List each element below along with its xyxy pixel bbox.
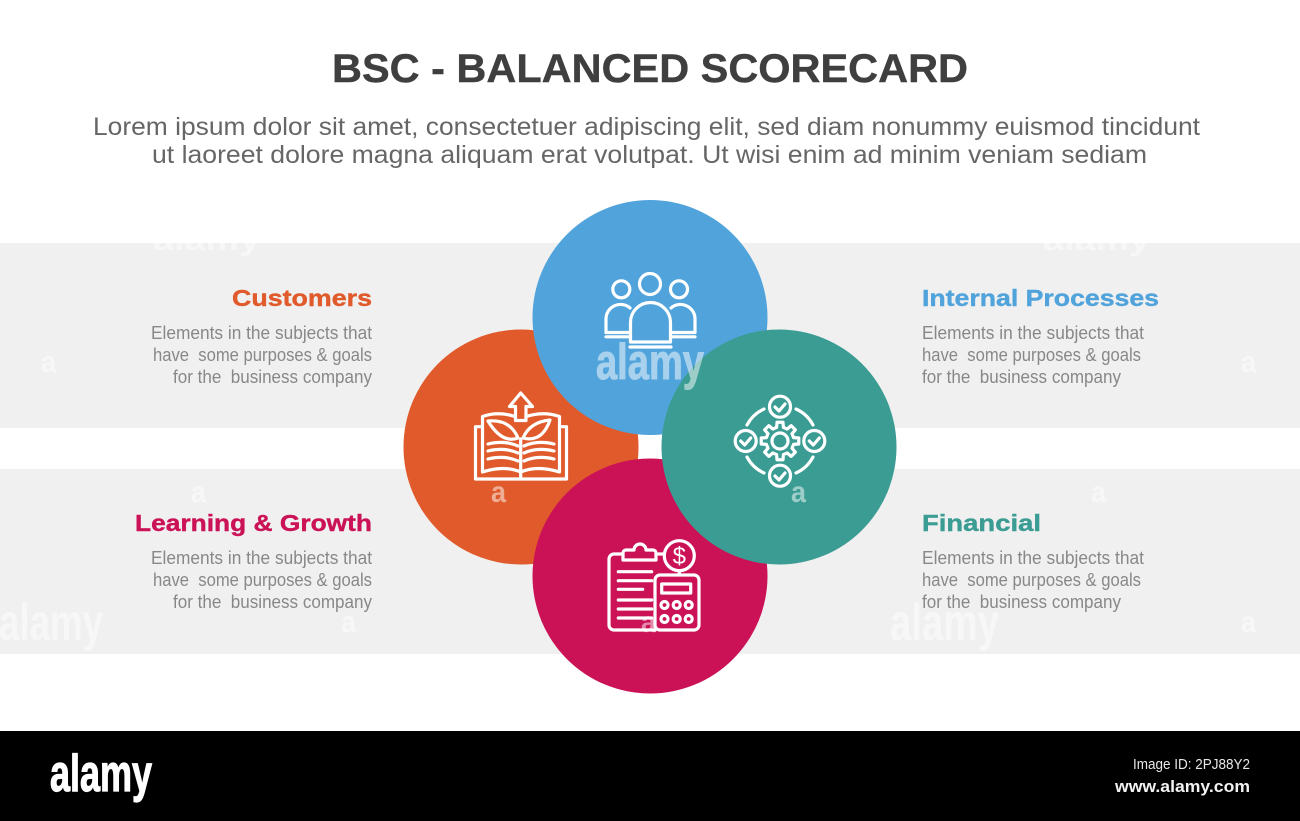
- subtitle: ut laoreet dolore magna aliquam erat volutpat. Ut wisi enim ad minim veniam sediam: [152, 141, 1147, 169]
- panel: financial: for the business company: [922, 592, 1121, 612]
- panel: financial: have some purposes & goals: [922, 570, 1141, 590]
- footer logo: alamy: [50, 745, 152, 803]
- title: BSC - BALANCED SCORECARD: [332, 47, 968, 91]
- panel: internal processes: Internal Processes: [922, 285, 1159, 311]
- watermark letter on orange: a: [491, 476, 506, 509]
- panel: internal processes: have some purposes & goals: [922, 345, 1141, 365]
- band watermarks: alamy: [1043, 224, 1150, 257]
- band watermarks: a: [41, 346, 56, 379]
- panel: learning and growth: Elements in the subjects that: [151, 548, 372, 568]
- watermark letter on teal: a: [791, 476, 806, 509]
- watermark: alamy on blue circle: alamy: [596, 334, 704, 390]
- band watermarks: a: [1241, 346, 1256, 379]
- panel: learning and growth: [135, 510, 372, 612]
- watermark letter on crimson: a: [641, 606, 656, 639]
- panel: internal processes: for the business company: [922, 367, 1121, 387]
- panel: internal processes: Elements in the subjects that: [922, 323, 1144, 343]
- footer image id: Image ID: 2PJ88Y2: [1133, 756, 1250, 773]
- panel: customers: [151, 285, 372, 387]
- circle: financial crimson: [532, 458, 768, 694]
- panel: financial: Elements in the subjects that: [922, 548, 1144, 568]
- band watermarks: a: [1091, 476, 1106, 509]
- panel: customers: for the business company: [173, 367, 372, 387]
- band watermarks: a: [341, 606, 356, 639]
- lower background band: [0, 469, 1300, 654]
- panel: customers: have some purposes & goals: [153, 345, 372, 365]
- panel: customers: Elements in the subjects that: [151, 323, 372, 343]
- icon: clipboard, dollar coin and calculator: $: [673, 543, 686, 570]
- panel: learning and growth: Learning & Growth: [135, 510, 372, 536]
- panel: internal processes: [922, 285, 1159, 387]
- circle: customers orange: [404, 330, 638, 564]
- panel: learning and growth: have some purposes & goals: [153, 570, 372, 590]
- circle: teal: [662, 330, 896, 564]
- subtitle: [93, 113, 1200, 169]
- icon: clipboard, dollar coin and calculator: [609, 541, 699, 630]
- band watermarks: a: [191, 476, 206, 509]
- icon: people group: [606, 274, 695, 347]
- panel: financial: [922, 510, 1144, 612]
- icon: gear with check cycle: [735, 396, 825, 486]
- band watermarks: alamy: [153, 224, 260, 257]
- band watermarks: [0, 224, 1256, 652]
- footer url: www.alamy.com: [1114, 777, 1250, 796]
- panel: financial: Financial: [922, 510, 1041, 536]
- panel: learning and growth: for the business company: [173, 592, 372, 612]
- circle: internal processes blue: [532, 200, 768, 435]
- band watermarks: a: [1241, 606, 1256, 639]
- band watermarks: alamy: [0, 594, 103, 652]
- panel: customers: Customers: [232, 285, 372, 311]
- subtitle: Lorem ipsum dolor sit amet, consectetuer adipiscing elit, sed diam nonummy euismod tincidunt: [93, 113, 1200, 141]
- upper background band: [0, 243, 1300, 428]
- footer bar: [0, 731, 1300, 821]
- band watermarks: alamy: [890, 594, 999, 652]
- icon: open book with plant and arrow: [476, 393, 566, 479]
